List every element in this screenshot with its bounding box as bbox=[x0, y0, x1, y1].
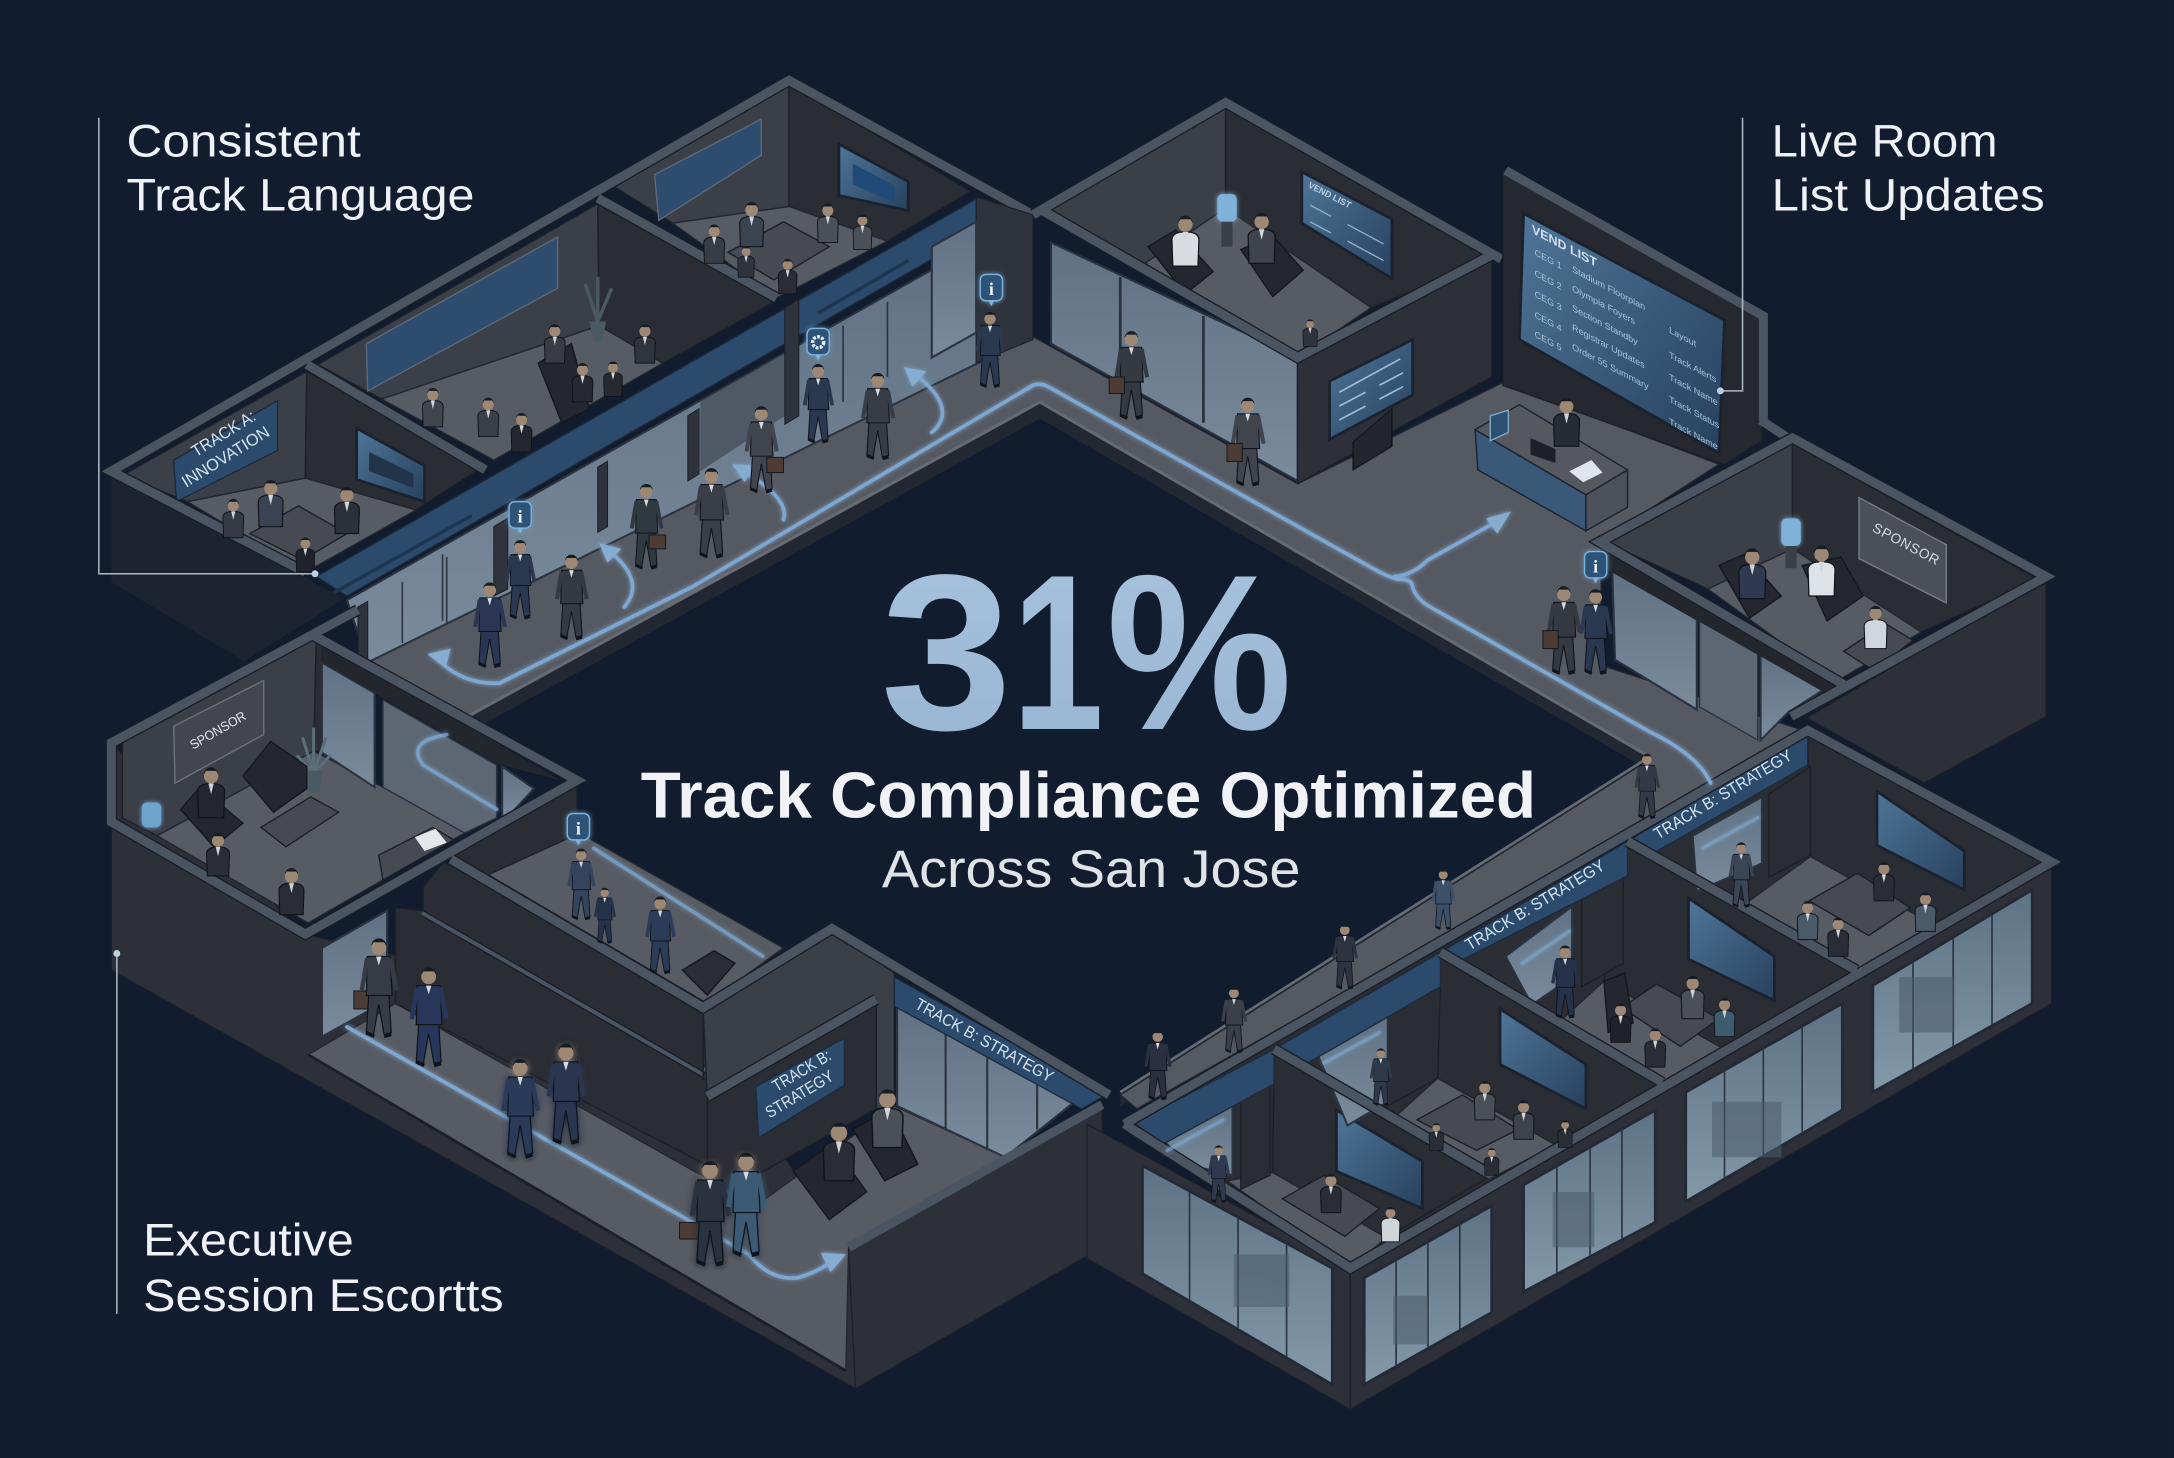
screen: room list: Olympia Foyers bbox=[1572, 284, 1635, 327]
escorted executives bbox=[503, 1044, 765, 1265]
info desk corridor floor bbox=[486, 832, 783, 1003]
receptionist bbox=[1554, 398, 1580, 446]
south-west sponsor room bbox=[122, 633, 560, 923]
lamp bbox=[1217, 194, 1237, 222]
glazing mullions bbox=[1190, 915, 1992, 1367]
chairs behind glazing bbox=[1234, 977, 1955, 1344]
sign: Track A Innovation bbox=[174, 401, 278, 502]
lamp bbox=[1781, 518, 1801, 546]
dark beam over glazing bbox=[1601, 549, 1844, 692]
sign: Track B Strategy: TRACK B: bbox=[769, 1046, 834, 1096]
callout dot bbox=[312, 570, 319, 577]
glass door lines bbox=[402, 302, 887, 643]
wall with track sign bbox=[707, 999, 876, 1195]
callout dot bbox=[113, 950, 120, 957]
screen: room list: CEG 5 bbox=[1535, 329, 1562, 354]
arrowhead 1 bbox=[599, 543, 621, 563]
arrowhead: reception bbox=[1486, 511, 1511, 534]
panel: live room list wall bbox=[1475, 169, 1797, 531]
reception desk bbox=[1475, 405, 1628, 531]
corridor attendees bbox=[362, 938, 446, 1065]
corridor floor bbox=[308, 1003, 1005, 1371]
callout text: Session Escortts bbox=[143, 1270, 504, 1321]
callout: live room list updates bbox=[1717, 116, 2045, 394]
back wall at corner bbox=[703, 931, 894, 1109]
panel: north-east sponsor lounge bbox=[1600, 438, 2046, 783]
wing rims bbox=[1124, 730, 2052, 1268]
pillars bbox=[1120, 277, 1203, 423]
screen: room list: CEG 4 bbox=[1535, 310, 1562, 335]
glass wall along corridor bbox=[347, 244, 1026, 662]
callout dot bbox=[1717, 387, 1724, 394]
outer wall bbox=[1806, 577, 2046, 783]
sign: Track B Strategy: STRATEGY bbox=[762, 1066, 837, 1122]
icon: info east bbox=[980, 274, 1002, 306]
armchairs bbox=[181, 741, 307, 847]
glass front bbox=[1051, 243, 1298, 481]
screen: room list: Registrar Updates bbox=[1572, 322, 1645, 371]
screen: room list: Track Name bbox=[1669, 417, 1718, 453]
glass entry doors bbox=[897, 1006, 1075, 1157]
rims bbox=[1600, 438, 2046, 717]
headline block bbox=[641, 528, 1536, 899]
glazing bbox=[1142, 890, 2032, 1385]
callout text: Executive bbox=[143, 1215, 354, 1266]
sign: Track B Strategy: TRACK B: STRATEGY bbox=[1462, 856, 1608, 954]
room: upper meeting room bbox=[610, 83, 971, 298]
big stat: 1 bbox=[1012, 528, 1104, 776]
corridor end door bbox=[322, 911, 387, 1037]
lamp bbox=[142, 802, 161, 827]
corridor dark wall bbox=[395, 908, 717, 1166]
banner: Track B Strategy: TRACK B: STRATEGY bbox=[912, 994, 1057, 1086]
branch 1 bbox=[610, 552, 633, 607]
info desk path bbox=[594, 848, 763, 956]
rims bbox=[1033, 103, 1501, 358]
icon: gear bbox=[807, 328, 829, 360]
wall section between glazing bbox=[1700, 620, 1758, 740]
walkway attendees bbox=[1146, 754, 1659, 1099]
glass front bbox=[1612, 571, 1697, 710]
side desk bbox=[379, 827, 454, 880]
blue banner along corridor bbox=[316, 198, 978, 596]
side window bbox=[502, 766, 534, 823]
callout: executive session escorts bbox=[113, 950, 504, 1321]
screen: room list: Track Status bbox=[1669, 394, 1719, 431]
glass panel right bbox=[1761, 654, 1823, 740]
room D bbox=[1628, 733, 2052, 973]
floor edge highlight bbox=[465, 402, 1650, 1092]
coffee table bbox=[261, 797, 339, 847]
branch 2 bbox=[915, 374, 942, 432]
armchairs bbox=[1148, 230, 1303, 297]
subheading: Across San Jose bbox=[882, 840, 1300, 899]
callout text: Consistent bbox=[127, 116, 361, 167]
lamp stand bbox=[1786, 546, 1797, 568]
sponsor sign bbox=[1859, 498, 1946, 603]
headline: Track Compliance Optimized bbox=[641, 759, 1536, 832]
floor slab edge bbox=[465, 405, 1650, 1106]
callout text: Track Language bbox=[127, 170, 474, 221]
banner: Track B Strategy bbox=[894, 977, 1106, 1109]
waiting chairs bbox=[793, 1109, 918, 1220]
callout text: List Updates bbox=[1772, 170, 2045, 221]
icon: info north-east: i bbox=[1593, 556, 1598, 576]
panel: north lounge room bbox=[1033, 103, 1501, 484]
right facade bbox=[1350, 862, 2052, 1409]
rims of south-west wing bbox=[111, 610, 1109, 1096]
icon: info south-west bbox=[567, 814, 589, 845]
icon: info south-west: i bbox=[576, 818, 581, 838]
sign: Track B Strategy bbox=[756, 1038, 844, 1138]
wall rim bbox=[423, 911, 717, 1080]
escort path bbox=[347, 1027, 836, 1278]
walking attendees north-west corridor bbox=[475, 312, 1611, 673]
screen: room list: CEG 2 bbox=[1535, 268, 1562, 293]
outer wall bbox=[111, 743, 1102, 1389]
sponsor sign bbox=[174, 680, 264, 783]
main path bbox=[441, 384, 1711, 783]
corridor side wall bbox=[455, 783, 577, 876]
briefcases bbox=[354, 377, 1558, 1239]
arrowhead 3 bbox=[732, 464, 754, 482]
monitor stand bbox=[1353, 409, 1392, 470]
door lines bbox=[946, 1033, 1037, 1150]
exterior front wall bbox=[1298, 258, 1492, 484]
branch to reception bbox=[1395, 520, 1500, 577]
glazed door bbox=[322, 662, 375, 787]
papers bbox=[415, 829, 447, 851]
wayfinding paths bbox=[347, 367, 1758, 1278]
sponsor lounge path bbox=[418, 735, 497, 809]
connecting wall rim bbox=[1761, 420, 1797, 443]
arrowhead 2 bbox=[904, 367, 926, 387]
front wall of track B room bbox=[849, 1102, 1102, 1389]
shadow block under north-west wing bbox=[111, 474, 344, 661]
room arrows bbox=[1167, 818, 1758, 1150]
screen: room list bbox=[1519, 213, 1725, 453]
callout text: Live Room bbox=[1772, 116, 1998, 167]
sponsor sign: SPONSOR bbox=[187, 708, 249, 752]
screen: room list: CEG 3 bbox=[1535, 289, 1562, 314]
room C bbox=[1440, 841, 1856, 1082]
standing presenters bbox=[1209, 842, 1753, 1202]
panel: south-east conference wing bbox=[1087, 730, 2052, 1409]
big stat: % bbox=[1106, 528, 1292, 776]
screen: room list: CEG 1 bbox=[1535, 248, 1562, 272]
corridor floor ring bbox=[368, 333, 1808, 1109]
screen: room list: Track Alerts bbox=[1669, 350, 1716, 386]
seated guests bbox=[198, 202, 1936, 1242]
armchairs bbox=[1719, 554, 1863, 621]
side table bbox=[1844, 624, 1913, 671]
big stat: 3 bbox=[880, 528, 1012, 776]
screen: room list: Section Standby bbox=[1572, 303, 1638, 348]
screen: room list: VEND LIST bbox=[1532, 222, 1597, 270]
screen: vendor list: VEND LIST bbox=[1306, 180, 1353, 210]
inner wall with wayfinding bbox=[383, 700, 497, 833]
sign: Track B Strategy: TRACK B: STRATEGY bbox=[1650, 746, 1795, 843]
room A bbox=[1134, 1049, 1492, 1268]
standing display bbox=[1330, 340, 1413, 439]
inner darker wall behind glass bbox=[700, 353, 785, 471]
room B bbox=[1274, 952, 1662, 1178]
sign: Track A Innovation: TRACK A: bbox=[188, 406, 259, 461]
info desk staff and delegates bbox=[569, 849, 674, 973]
corridor floor bbox=[368, 333, 1808, 1109]
screen: room list: Stadium Floorplan bbox=[1572, 264, 1645, 313]
icon: info west: i bbox=[518, 506, 523, 526]
sign: Track A Innovation: INNOVATION bbox=[178, 422, 273, 491]
front wall rim bbox=[849, 1105, 1102, 1247]
divider wall face bbox=[423, 862, 717, 1080]
left facade bbox=[1087, 1124, 1350, 1409]
dark beam over glazing bbox=[321, 640, 560, 780]
branch 3 bbox=[743, 471, 784, 520]
plant bbox=[297, 728, 330, 793]
screen: room list: Layout bbox=[1669, 325, 1696, 350]
room: track A room bbox=[122, 371, 480, 572]
sponsor sign: SPONSOR bbox=[1870, 519, 1943, 568]
people bbox=[198, 202, 1936, 1265]
icon: info west bbox=[509, 502, 531, 534]
lamp stand bbox=[1221, 222, 1233, 247]
banner lights bbox=[333, 261, 908, 593]
panel: north-west conference wing bbox=[111, 80, 1033, 662]
callout: consistent track language bbox=[99, 116, 474, 577]
arrowhead: escort bbox=[821, 1253, 846, 1272]
rims of north-west wing bbox=[111, 80, 1033, 572]
info icons bbox=[509, 274, 1607, 845]
screen: vendor list bbox=[1302, 172, 1392, 279]
corridor pillars bbox=[358, 197, 1033, 662]
room: middle meeting room bbox=[318, 204, 774, 460]
icon: info north-east bbox=[1585, 552, 1607, 583]
screen: room list: Track Name bbox=[1669, 372, 1718, 408]
podium bbox=[682, 951, 735, 995]
big stat bbox=[880, 528, 1292, 776]
icon: info east: i bbox=[989, 279, 994, 299]
wing floor base bbox=[1124, 733, 2052, 1268]
arrowhead: west bbox=[427, 649, 451, 668]
wall corner edge bbox=[308, 1055, 846, 1371]
screen: room list: Order 55 Summary bbox=[1572, 342, 1649, 393]
panel: south-west wing bbox=[111, 610, 1109, 1389]
